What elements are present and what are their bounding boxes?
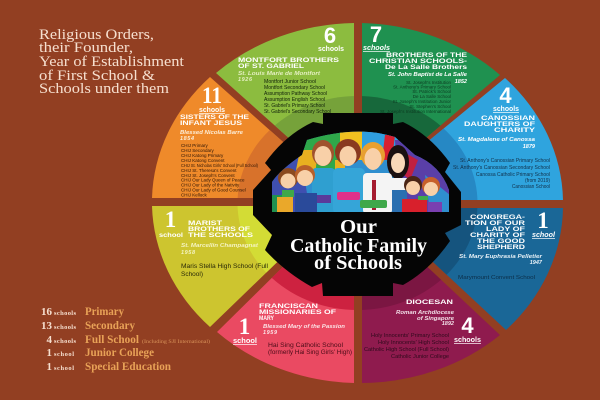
panel: Montfort Brothers: Montfort Secondary School: [264, 85, 325, 91]
panel: Canossian Daughters of Charity: DAUGHTERS OF: [464, 121, 535, 128]
panel: Canossian Daughters of Charity: (from 2019): [525, 178, 550, 184]
legend: school counts by level: 4: [46, 334, 52, 346]
panel: De La Salle Brothers: [362, 23, 500, 138]
legend: school counts by level: 16: [41, 306, 52, 318]
panel: Good Shepherd congregation: Marymount Convent School: [458, 275, 535, 281]
icon: pink book: [337, 192, 360, 200]
panel: Marist Brothers: 1: [165, 207, 176, 232]
panel: Diocesan: schools: [454, 337, 481, 344]
panel: Good Shepherd congregation: SHEPHERD: [477, 244, 526, 251]
panel: Diocesan: 4: [461, 313, 474, 338]
legend: school counts by level: Secondary: [85, 318, 135, 332]
panel: Good Shepherd congregation: LADY OF: [486, 226, 525, 233]
panel: Diocesan: Roman Archdiocese: [396, 310, 454, 316]
title: Year of Establishment: [39, 54, 185, 70]
panel: Sisters of the Infant Jesus: CHIJ St. Theresa's Convent: [181, 168, 237, 173]
panel: Canossian Daughters of Charity: schools: [493, 106, 519, 113]
legend: school counts by level: Full School: [85, 332, 140, 346]
panel: Franciscan Missionaries of Mary: 1: [239, 314, 250, 339]
panel: Sisters of the Infant Jesus: SISTERS OF THE: [180, 114, 249, 121]
icon: small girl with yellow book: [277, 168, 298, 213]
legend: school counts by level: Special Education: [85, 359, 171, 373]
icon: small child with red book: [402, 176, 427, 213]
panel: Good Shepherd congregation: THE GOOD: [477, 238, 526, 245]
panel: Sisters of the Infant Jesus: 11: [202, 83, 222, 108]
panel: Canossian Daughters of Charity: [420, 78, 563, 200]
legend: school counts by level: 13: [41, 320, 52, 332]
legend: school counts by level: school: [54, 365, 74, 372]
panel: Good Shepherd congregation: 1: [537, 208, 549, 233]
panel: De La Salle Brothers: CHRISTIAN SCHOOLS-: [369, 58, 467, 65]
panel: Sisters of the Infant Jesus: 1854: [180, 136, 194, 142]
legend: school counts by level: 1: [46, 361, 52, 373]
icon: boy with tie: [360, 142, 392, 214]
panel: Marist Brothers: MARIST: [188, 220, 222, 227]
central title: Our: [340, 216, 377, 238]
panel: Canossian Daughters of Charity: Canossa Catholic Primary School: [476, 172, 550, 178]
panel: Diocesan: Catholic Junior College: [391, 354, 449, 360]
panel: Montfort Brothers: St. Gabriel's Secondary School: [264, 109, 331, 115]
panel: De La Salle Brothers: 1852: [455, 79, 467, 85]
legend: school counts by level: (Including SJI International): [142, 338, 210, 345]
panel: De La Salle Brothers: St. Stephen's School: [409, 104, 451, 109]
panel: Montfort Brothers: [216, 23, 354, 138]
legend: school counts by level: schools: [54, 310, 76, 317]
panel: Montfort Brothers: Assumption English School: [264, 97, 325, 103]
panel: Diocesan: of Singapore: [417, 316, 454, 322]
panel: De La Salle Brothers: BROTHERS OF THE: [386, 52, 467, 59]
panel: Montfort Brothers: schools: [318, 46, 344, 53]
panel: Montfort Brothers: 6: [324, 23, 336, 48]
legend: school counts by level: [41, 304, 210, 373]
panel: Franciscan Missionaries of Mary: (formerly Hai Sing Girls' High): [268, 350, 352, 356]
panel: Marist Brothers: THE SCHOOLS: [188, 232, 253, 239]
panel: De La Salle Brothers: St. Anthony's Primary School: [393, 84, 451, 90]
panel: Canossian Daughters of Charity: CHARITY: [494, 127, 536, 134]
panel: Good Shepherd congregation: [420, 208, 563, 330]
panel: Marist Brothers: Maris Stella High School (Full: [181, 263, 269, 270]
panel: Montfort Brothers: OF ST. GABRIEL: [238, 63, 304, 70]
panel: Marist Brothers: School): [181, 271, 203, 278]
panel: Franciscan Missionaries of Mary: Blessed Mary of the Passion: [263, 324, 346, 330]
panel: Sisters of the Infant Jesus: schools: [199, 107, 225, 114]
panel: Montfort Brothers: 1926: [238, 77, 253, 83]
panel: Franciscan Missionaries of Mary: 1959: [263, 330, 278, 336]
icon: small boy with blue book: [295, 165, 331, 213]
legend: school counts by level: schools: [54, 338, 76, 345]
panel: Montfort Brothers: St. Gabriel's Primary School: [264, 103, 325, 109]
panel: Canossian Daughters of Charity: Canossian School: [512, 184, 550, 190]
panel: Canossian Daughters of Charity: St. Anthony's Canossian Primary School: [460, 158, 550, 164]
panel: De La Salle Brothers: St. Patrick's School: [412, 89, 451, 94]
panel: De La Salle Brothers: 7: [370, 22, 382, 47]
panel: De La Salle Brothers: St. Joseph's Institution Junior: [393, 99, 452, 104]
central title: of Schools: [314, 252, 402, 274]
panel: Marist Brothers: St. Marcellin Champagnat: [181, 243, 259, 249]
panel: De La Salle Brothers: St. Joseph's Institution International: [380, 109, 451, 114]
legend: school counts by level: 1: [46, 347, 52, 359]
panel: Montfort Brothers: Montfort Junior School: [264, 79, 316, 85]
panel: Diocesan: 1892: [442, 321, 454, 327]
panel: Good Shepherd congregation: CONGREGA-: [470, 214, 525, 221]
panel: Diocesan: DIOCESAN: [406, 299, 454, 306]
central title: Catholic Family: [290, 235, 427, 257]
title: [39, 27, 185, 97]
panel: Canossian Daughters of Charity: 1879: [523, 144, 536, 150]
panel: Franciscan Missionaries of Mary: MISSIONARIES OF: [259, 309, 336, 316]
title: their Founder,: [39, 40, 133, 56]
panel: Montfort Brothers: MONTFORT BROTHERS: [238, 57, 339, 64]
title: Religious Orders,: [39, 27, 154, 43]
panel: Marist Brothers: school: [159, 232, 183, 239]
panel: Sisters of the Infant Jesus: CHIJ Our Lady Queen of Peace: [181, 178, 245, 183]
panel: De La Salle Brothers: schools: [363, 45, 390, 52]
panel: Marist Brothers: [152, 206, 278, 327]
panel: Sisters of the Infant Jesus: CHIJ St. Joseph's Convent: [181, 173, 235, 178]
icon: small girl with purple book: [418, 177, 442, 213]
panel: Sisters of the Infant Jesus: CHIJ Our Lady of Good Counsel: [181, 188, 246, 193]
panel: Canossian Daughters of Charity: CANOSSIAN: [481, 115, 536, 122]
panel: Diocesan: Holy Innocents' Primary School: [371, 333, 449, 339]
panel: De La Salle Brothers: De La Salle Brothers: [385, 64, 468, 71]
panel: Good Shepherd congregation: 1947: [530, 260, 543, 266]
legend: school counts by level: school: [54, 351, 74, 358]
panel: Diocesan: [362, 267, 500, 383]
panel: Franciscan Missionaries of Mary: [217, 267, 354, 383]
title: Schools under them: [39, 81, 169, 97]
icon: tall girl: [333, 139, 365, 214]
panel: Franciscan Missionaries of Mary: school: [233, 338, 257, 345]
panel: Sisters of the Infant Jesus: INFANT JESUS: [180, 120, 242, 127]
panel: Marist Brothers: 1958: [181, 250, 196, 256]
panel: Diocesan: Catholic High School (Full School): [364, 347, 449, 353]
panel: Sisters of the Infant Jesus: CHIJ Our Lady of the Nativity: [181, 183, 240, 188]
panel: Sisters of the Infant Jesus: CHIJ Katong Primary: [181, 153, 224, 158]
panel: Sisters of the Infant Jesus: [152, 77, 284, 198]
icon: tall boy: [312, 140, 335, 214]
panel: Sisters of the Infant Jesus: CHIJ Secondary: [181, 148, 215, 153]
legend: school counts by level: Primary: [85, 304, 124, 318]
icon: girl with long black hair: [387, 145, 409, 214]
panel: Canossian Daughters of Charity: 4: [499, 83, 512, 108]
title: of First School &: [39, 68, 155, 84]
legend: school counts by level: schools: [54, 324, 76, 331]
central title: [290, 216, 427, 274]
legend: school counts by level: Junior College: [85, 345, 155, 359]
panel: De La Salle Brothers: De La Salle School: [413, 94, 451, 99]
panel: Sisters of the Infant Jesus: Blessed Nicolas Barre: [180, 130, 243, 136]
panel: Montfort Brothers: Assumption Pathway School: [264, 91, 327, 97]
panel: Sisters of the Infant Jesus: CHIJ Katong Convent: [181, 158, 225, 163]
panel: Diocesan: Holy Innocents' High School: [378, 340, 449, 346]
panel: Sisters of the Infant Jesus: CHIJ Primary: [181, 143, 208, 148]
panel: Canossian Daughters of Charity: St. Magdalene of Canossa: [458, 137, 535, 143]
panel: Good Shepherd congregation: TION OF OUR: [465, 220, 526, 227]
panel: Montfort Brothers: St. Louis Marie de Montfort: [238, 71, 321, 77]
panel: Sisters of the Infant Jesus: CHIJ Kellock: [181, 192, 208, 198]
panel: Franciscan Missionaries of Mary: MARY: [259, 315, 275, 322]
central black gear: [253, 113, 461, 296]
panel: Good Shepherd congregation: St. Mary Euphrasia Pelletier: [459, 254, 543, 260]
panel: De La Salle Brothers: St. Joseph's Institution: [406, 80, 451, 85]
panel: Sisters of the Infant Jesus: CHIJ St. Nicholas Girls' School (Full School): [181, 163, 258, 168]
panel: Canossian Daughters of Charity: St. Anthony's Canossian Secondary School: [453, 165, 550, 171]
panel: Franciscan Missionaries of Mary: Hai Sing Catholic School: [268, 343, 343, 349]
illustration: stained glass window with children reading: [272, 132, 449, 212]
panel: Franciscan Missionaries of Mary: FRANCISCAN: [259, 303, 319, 310]
panel: Good Shepherd congregation: CHARITY OF: [470, 232, 525, 239]
panel: Marist Brothers: BROTHERS OF: [188, 226, 250, 233]
panel: Good Shepherd congregation: school: [532, 232, 556, 239]
panel: De La Salle Brothers: St. John Baptist de La Salle: [388, 72, 467, 78]
